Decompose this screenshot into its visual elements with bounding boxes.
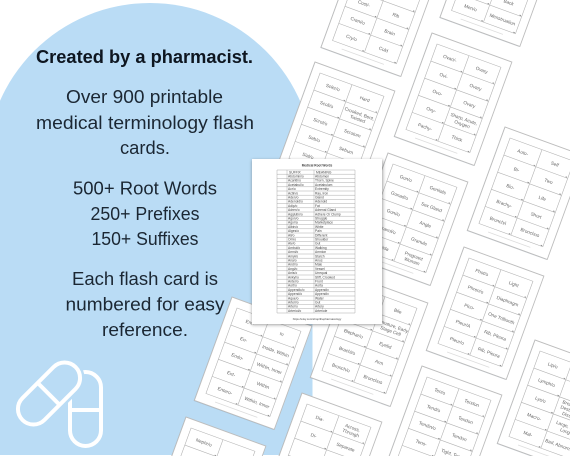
flash card: Ovar: Ovo- [432,89,443,97]
flash card: Ovar: Ovary [475,66,489,75]
flash card: Dia: Di- [310,432,318,439]
table text: Shoulder [315,238,329,242]
table text: White [315,225,324,229]
table title: Medical Root Words [302,164,333,168]
flash card: Lip: Lip/o [547,361,559,370]
flash card: Gon: Goni/o [386,208,401,218]
flash card: Auto [467,127,570,260]
flash card: En: In [279,331,285,337]
flash card: Auto: Life [538,195,547,202]
table text: Water [315,296,325,300]
table text: Alv/o [288,242,295,246]
table text: Adip/o [288,204,298,208]
table text: Extremity [315,187,329,191]
table text: MEANING [316,170,332,174]
flash card: En: Em- [245,319,255,327]
flash card: Auto: Bronch/i [489,216,507,226]
flash card: Scler: Hard [359,95,371,103]
flash card: Ten: Tendon [457,415,474,425]
table text: Aorta [315,284,323,288]
flash card: Gon: Sex Gland [420,201,443,213]
table text: Angi/o [288,267,298,271]
table text: Fat [315,204,320,208]
table text: Acr/o [288,187,296,191]
flash card: Ten: Ten/o [434,387,446,396]
flash card: Phot [426,247,544,380]
table text: All/o [288,233,295,237]
flash card: Lip: Lymph/o [537,377,556,388]
flash card: Men: Men/o [464,3,478,13]
counts: 500+ Root Words [73,178,217,198]
main copy [36,47,254,340]
flash card: Bleph: Bil/i [361,296,370,303]
flash card: Auto: Bi- [513,166,521,173]
flash card: Dia: Across, [344,423,361,433]
flash card: Gon [382,152,468,286]
flash card: Ovar: Ovi- [439,72,449,80]
table text: Aque/o [288,296,299,300]
table text: Starch [315,254,325,258]
flash card: Lip [497,340,570,456]
flash card: Bleph: Bronchus [363,374,384,386]
flash card: Scler: Sebum [338,146,354,155]
table text: Arteri/o [288,300,299,304]
table text: Adenoid/o [288,200,303,204]
flash card: Ten [384,366,502,456]
table text: Appendix [315,288,329,292]
flash card: Gon: Angle [419,220,432,229]
flash card: Scler: Sial/o [302,152,315,160]
document page: root word table [252,159,383,325]
flash card: Ten: Tendin/o [418,420,437,431]
flash card: Cost, Crani, Cry: Crani/o [350,16,366,26]
flash card: Ovar [394,33,512,166]
table text: Amni/o [288,250,298,254]
flash card: Phot: Diaphragm [496,295,519,308]
table text: Anis/o [288,271,297,275]
flash card: Ovar: Ovari/- [442,54,458,63]
table text: Adenoid [315,200,327,204]
flash card: Ovar: Thick [451,134,464,143]
flash card: Ten: Tendon [451,432,468,442]
description [36,87,254,158]
table text: Walking [315,246,327,250]
numbering note: Each flash card is [72,269,218,289]
table text: Aden/o [288,196,299,200]
table text: Adhere Or Clump [315,212,341,216]
flash card: Auto: Auto- [517,148,529,157]
flash card: Gon: Genitals [429,185,447,196]
flash card: Bleph: Eyelid [378,341,393,350]
numbering note: numbered for easy [66,294,224,314]
flash card: En: Within, Inner [244,396,271,410]
flash card: Bleph: Brachi/o [338,346,356,356]
table text: Alges/o [288,229,299,233]
heading: Created by a pharmacist. [36,47,253,67]
table text: Amnion [315,250,326,254]
flash card: Gon: Granule [410,236,428,247]
table text: Ray, Iron [315,191,328,195]
flash card: Gon: Gravida [372,242,390,252]
table text: Abdomin/o [288,174,304,178]
flash card: Bleph: Bronch/o [331,362,351,374]
flash card: Nephr: Nephr/o [195,437,213,448]
flash card: Gon: Granul/o [378,224,397,235]
table text: Marketplace [315,221,333,225]
flash card: Bleph: Blephar/o [343,328,364,340]
flash card: Auto: Two [544,177,554,185]
flash card: Cost, Crani, Cry: Cold [378,46,389,54]
table text: Agglutin/o [288,212,303,216]
flash card: Scler [279,62,396,159]
table text: Male [315,263,322,267]
table text: SUFFIX [289,170,302,174]
flash card: Scler: Scrotum [343,128,361,139]
table text: Acanth/o [288,179,301,183]
flash card: Bleph: Stage Cell [380,325,402,337]
table text: Thorn, Spine [315,179,334,183]
flash card: Lip: Mal- [523,430,533,438]
flash card: Cost, Crani, Cry: Rib [392,12,400,19]
flash card: En: Entero- [217,386,233,396]
flash card: Phot: Rib, Pleura [477,346,501,359]
table text: Appendix [315,292,329,296]
flash card: Ovar: Sharp, Acute, [450,112,478,126]
flash card: Phot: Rib, Pleura [483,329,507,342]
flash card: Dia [278,392,382,456]
flash card: En: Ent- [226,370,236,378]
table text: Arter/o [288,305,298,309]
description: Over 900 printable [66,87,223,107]
icon: pills [12,356,101,446]
flash card: Auto: Bio- [506,183,516,191]
table text: Append/o [288,292,302,296]
flash card: Men [439,0,538,47]
table text: Acetabulum [315,183,333,187]
flash card: Bleph: Bile [393,307,403,315]
table text: Acetabul/o [288,183,304,187]
table text: Unequal [315,271,328,275]
table text [288,170,341,313]
table grid [277,170,355,313]
table text: Stiff, Crooked [315,275,335,279]
counts: 150+ Suffixes [92,229,198,249]
flash card: Bleph: Blast/o [352,312,368,322]
flash card: Phot: Phot/o [475,268,489,277]
flash card: Phot: Pico- [464,303,476,311]
flash card: Scler: Scler/o [325,83,341,93]
table text: Albin/o [288,225,298,229]
flash card: Dia: Dia- [315,415,325,423]
table text: Anus [315,258,323,262]
table text: Gut [315,300,320,304]
flash card: Scler: Scoli/o [319,100,334,110]
flash card: Phot: Pleur/A [455,319,472,329]
flash card: Men: Menstruation [489,13,516,27]
flash card: Bleph: Immature, Early [376,318,409,334]
table text: Adren/o [288,208,300,212]
flash card: Gon: Gonad/o [390,190,409,201]
flash card: Ten: Tens- [415,439,428,447]
document footer: https://etsy.com/shop/thepharmacology [293,317,342,321]
table text: Ankyl/o [288,275,299,279]
flash card: Cost, Crani, Cry [320,0,438,77]
flash card: En: Within, Inner [256,362,283,375]
flash card: Dia: Through [342,428,360,439]
flash card: Cost, Crani, Cry: Cry/o [345,34,358,42]
table text: Andr/o [288,263,298,267]
flash card: En: Within [256,381,270,390]
flash card: Bleph: Arm [374,359,384,366]
flash card: Ovar: Ovary [469,83,483,92]
table text: Ambul/o [288,246,300,250]
table text: Front [315,280,323,284]
flash card: Dia: Separate [336,442,356,453]
table text: Appendic/o [288,288,305,292]
flash card: Phot: One Trillionth [488,311,516,326]
counts [73,178,217,249]
table text: Pain [315,229,322,233]
table text: Anter/o [288,280,299,284]
flash card: Scler: Scrot/o [313,117,329,127]
flash card: Ten: Tendon [464,398,480,408]
flash card: Ovar: Ovary [463,100,477,109]
table text: Amyl/o [288,254,298,258]
description: medical terminology flash [36,113,254,133]
flash card: En: En- [239,336,248,343]
table text: Actin/o [288,191,298,195]
flash card: Scler: Seb/o [308,134,321,143]
flash card set [148,0,570,456]
numbering note [66,269,224,340]
table text: Gut [315,242,320,246]
flash card: Scler: Crooked, Bent, [344,106,375,122]
flash card: Gon: Woman [403,256,421,267]
table text: Ana/o [288,258,297,262]
flash card: Bleph [310,274,428,407]
flash card: Lip: Macro- [526,412,542,422]
blue arched background [0,3,314,455]
flash card: Gon: Gon/o [399,174,413,183]
table text: Adrenal Gland [315,208,336,212]
flash card: Scler: Twisted [349,114,366,124]
flash card: Ovar: Oxy- [426,106,437,114]
flash card: En: Inside, Within [261,344,290,359]
flash card: Scler: Saliva [333,163,347,172]
flash card: Phot: Light [508,280,520,288]
flash card: Auto: Bronchus [520,227,541,239]
flash card: Auto: Short [530,211,543,220]
flash card: Lip: Lys/o [534,396,547,404]
table text: Artery [315,305,324,309]
table text: Vessel [315,267,325,271]
table text: Struggle [315,216,327,220]
flash card: Auto: Brachy- [496,199,513,209]
flash card: En [194,297,312,430]
flash card: Auto: Self [550,160,560,168]
flash card: Cost, Crani, Cry: Brain [384,28,396,37]
table text: Om/o [288,238,296,242]
flash card: Ovar: Oxygen [454,119,471,129]
table text: Arteriole [315,309,327,313]
flash card: Nephr [171,416,266,456]
flash card: Ovar: Pachy- [417,122,433,132]
table text: Gland [315,196,324,200]
flash card: Phot: Pleur/o [449,336,465,346]
flash card: Ten: Tend/o [426,404,441,414]
table text: Agor/a [288,221,298,225]
counts: 250+ Prefixes [90,204,200,224]
flash card: Gon: Pregnant [404,251,424,262]
numbering note: reference. [102,320,188,340]
table text: Different [315,233,327,237]
table text: Arteriol/o [288,309,301,313]
description: cards. [120,138,170,158]
flash card: Phot: Phren/o [467,284,485,295]
flash card: En: Endo- [231,352,245,361]
table text: Aort/o [288,284,297,288]
table text: Abdomen [315,174,329,178]
table text: Agon/o [288,216,299,220]
